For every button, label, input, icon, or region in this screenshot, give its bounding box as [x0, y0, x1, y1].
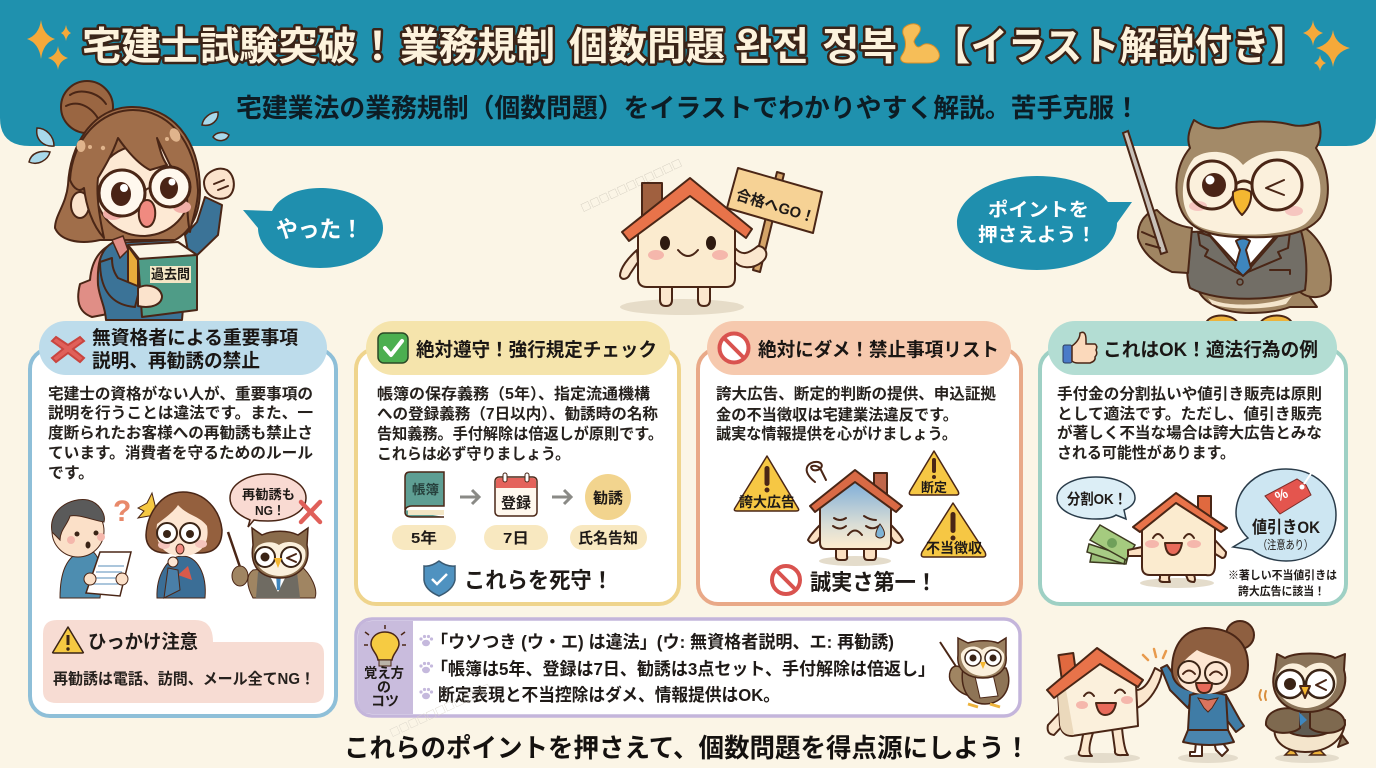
panel: prohibited items	[698, 321, 1021, 604]
warning sign: 誇大広告: 誇大広告	[739, 494, 795, 510]
tip side tab	[358, 621, 413, 714]
icon: light bulb	[364, 625, 406, 666]
panel: unqualified persons prohibition	[30, 321, 336, 716]
open eye	[1202, 173, 1226, 197]
title: 個数問題	[569, 26, 725, 69]
note: ※著しい不当値引きは	[1228, 568, 1337, 582]
speech bubble: 値引きOK: 値引きOK	[1252, 518, 1321, 537]
sign board	[727, 168, 822, 233]
callout: trap warning	[43, 620, 324, 703]
speech bubble: 分割OK！	[1057, 477, 1135, 519]
head	[1176, 120, 1328, 237]
panel heading: 絶対遵守！強行規定チェック	[416, 339, 657, 361]
icon: registration calendar	[495, 473, 537, 516]
illustration: happy house	[1128, 493, 1227, 588]
icon: small red cross	[301, 502, 320, 522]
body text: 度断られたお客様への再勧誘も禁止さ	[48, 423, 313, 442]
house body	[638, 190, 735, 287]
tie	[1235, 238, 1251, 276]
body text	[1057, 384, 1322, 462]
icon: motion lines	[1260, 690, 1266, 700]
arrow	[552, 490, 571, 504]
speech bubble: 値引きOK	[1233, 469, 1336, 561]
character: house mascot with sign	[620, 168, 822, 315]
wing right	[1300, 225, 1331, 297]
panel header pill	[1048, 321, 1337, 375]
tip tab label: 覚え方	[364, 665, 404, 681]
illustration: small owl with memo	[940, 638, 1009, 707]
hand	[138, 286, 162, 307]
closing phrase: 誠実さ第一！	[810, 570, 937, 595]
backpack	[78, 240, 122, 317]
mouth	[139, 200, 155, 227]
speech bubble: ポイントを押さえよう！: ポイントを	[988, 198, 1089, 221]
body text: これらは必ず守りましょう。	[377, 445, 570, 463]
title: 業務規制	[400, 26, 555, 69]
panel header pill	[39, 321, 327, 375]
blush	[1189, 201, 1303, 216]
face patch	[1183, 151, 1320, 234]
body text: ています。消費者を守るためのルール	[48, 444, 314, 462]
title: 완전	[735, 26, 809, 69]
fist	[204, 169, 234, 199]
panel header pill	[366, 321, 670, 375]
panel heading	[92, 327, 298, 372]
icon: stress swirl	[807, 462, 826, 482]
speech bubble: ポイントを押さえよう！: 押さえよう！	[978, 224, 1096, 246]
speech bubble: 再勧誘もNG！: NG！	[255, 503, 285, 518]
character: surprised girl with book: 過去問	[151, 266, 190, 282]
watermark: □□□□□□□□□□□	[387, 680, 493, 740]
icon: sparkles right	[1303, 20, 1350, 71]
label pill: 7日	[484, 525, 548, 550]
title	[82, 26, 1307, 69]
ear	[71, 192, 89, 218]
icon: solicitation circle	[585, 474, 631, 520]
title: ！	[358, 26, 397, 69]
body text: される可能性があります。	[1057, 443, 1235, 462]
lapels	[1198, 232, 1290, 275]
icon: no entry	[772, 566, 800, 594]
icon: sweat drops	[29, 112, 229, 163]
book cover	[138, 255, 197, 317]
speech bubble: 分割OK！: 分割OK！	[1067, 491, 1127, 508]
bun	[61, 81, 113, 133]
hair fringe	[70, 110, 198, 238]
body text: 説明を行うことは違法です。また、一	[48, 403, 313, 422]
tip line 3: 断定表現と不当控除はダメ、情報提供はOK。	[438, 685, 780, 705]
panel heading: これはOK！適法行為の例	[1103, 339, 1318, 361]
winking eye	[1266, 180, 1284, 195]
torso	[98, 240, 188, 320]
panel frame	[356, 349, 679, 604]
legs	[660, 285, 710, 306]
icon: shield	[424, 561, 455, 596]
belly and tail	[1198, 288, 1317, 313]
icon: flexed bicep	[901, 24, 939, 63]
illustration: small owl with bubble	[228, 528, 316, 598]
subtitle: 宅建業法の業務規制（個数問題）をイラストでわかりやすく解説。苦手克服！	[236, 93, 1140, 123]
title: 【イラスト解説付き】	[933, 26, 1307, 69]
tip tab label: の	[377, 679, 391, 695]
book pages	[128, 242, 197, 260]
header band	[0, 0, 1376, 146]
icon: green check	[378, 333, 408, 363]
character: owl teacher with pointer	[1123, 120, 1331, 323]
glasses	[1188, 160, 1302, 210]
panel frame	[1040, 349, 1346, 604]
icon: sparkles left	[27, 20, 71, 70]
icon: banknotes	[1087, 525, 1135, 564]
warning sign: 不当徴収	[921, 503, 986, 557]
warning sign: 不当徴収: 不当徴収	[926, 540, 982, 556]
label pill: 氏名告知: 氏名告知	[578, 529, 638, 547]
shirt	[1208, 233, 1278, 272]
title: 정복	[822, 26, 897, 69]
icon: paw	[419, 688, 433, 699]
panel heading: 絶対にダメ！禁止事項リスト	[758, 338, 999, 361]
body text: 金の不当徴収は宅建業法違反です。	[716, 405, 958, 424]
left arm	[1138, 210, 1192, 273]
chimney	[642, 183, 662, 217]
illustration: owl clapping	[1266, 654, 1348, 763]
panel frame	[30, 349, 336, 716]
pointer	[1123, 131, 1167, 254]
body text: 誇大広告、断定的判断の提供、申込証拠	[716, 385, 996, 403]
icon: paw	[419, 635, 433, 646]
pink strap	[112, 236, 128, 258]
label pill: 5年	[392, 525, 456, 550]
tip line 1: 「ウソつき (ウ・エ) は違法」(ウ: 無資格者説明、エ: 再勧誘)	[431, 632, 894, 652]
icon: ledger book	[405, 472, 444, 517]
hair highlights	[76, 127, 182, 152]
suit	[1187, 228, 1306, 299]
body text: 誠実な情報提供を心がけましょう。	[716, 424, 957, 443]
speech bubble: 値引きOK: （注意あり）	[1258, 538, 1313, 552]
icon: warning triangle	[53, 627, 83, 653]
shadow	[620, 299, 744, 315]
body text	[377, 384, 663, 463]
tip line 2: 「帳簿は5年、登録は7日、勧誘は3点セット、手付解除は倍返し」	[431, 659, 935, 679]
body text	[716, 385, 996, 443]
icon: registration calendar: 登録	[501, 494, 531, 512]
callout heading: ひっかけ注意	[88, 631, 198, 653]
warning sign: 断定: 断定	[921, 480, 947, 495]
speech bubble: ポイントを押さえよう！	[957, 176, 1132, 270]
body text: 帳簿の保存義務（5年）、指定流通機構	[377, 384, 651, 403]
icon: solicitation circle: 勧誘	[593, 490, 623, 507]
hand fingers	[1142, 232, 1160, 248]
roof	[622, 178, 752, 241]
label pill: 7日: 7日	[503, 530, 529, 547]
closing phrase: これらを死守！	[464, 568, 613, 593]
tip tab label	[364, 665, 404, 709]
panel heading: 説明、再勧誘の禁止	[92, 350, 260, 372]
label pill: 5年: 5年	[411, 529, 437, 547]
speech bubble: やった！	[243, 188, 383, 268]
post	[753, 172, 784, 272]
closing message: これらのポイントを押さえて、個数問題を得点源にしよう！	[344, 733, 1030, 763]
body text: が著しく不当な場合は誇大広告とみな	[1057, 423, 1322, 442]
icon: question mark: ?	[113, 495, 131, 528]
note	[1228, 568, 1337, 598]
watermark: □□□□□□□□□□□	[578, 155, 684, 215]
feet	[1206, 316, 1292, 323]
book label	[150, 266, 191, 283]
panel frame	[356, 619, 1020, 716]
icon: red cross	[52, 337, 84, 362]
panel: legal acts	[1040, 321, 1346, 604]
hair back	[55, 107, 200, 242]
blush	[103, 201, 191, 220]
book orange edge	[128, 246, 138, 298]
panel: mandatory rules check	[356, 321, 679, 604]
illustration: surprised woman	[146, 492, 222, 598]
body text: への登録義務（7日以内）、勧誘時の名称	[377, 404, 658, 423]
sleeve	[100, 258, 140, 307]
body text	[48, 384, 314, 482]
sign text: 合格へGO！	[734, 186, 818, 227]
icon: ledger book: 帳簿	[412, 482, 439, 497]
tip tab label: コツ	[371, 693, 399, 709]
button and pocket	[1237, 270, 1290, 285]
icon: no entry	[720, 334, 748, 362]
label pill: 氏名告知	[570, 525, 647, 550]
face	[648, 236, 728, 260]
note: 誇大広告に該当！	[1238, 584, 1325, 598]
body text: 宅建士の資格がない人が、重要事項の	[48, 384, 313, 403]
character: surprised girl with book	[29, 81, 234, 320]
title: 宅建士試験突破	[82, 26, 357, 69]
body text: として適法です。ただし、値引き販売	[1057, 404, 1322, 423]
speech bubble: 値引きOK: %	[1272, 485, 1291, 505]
beak	[1233, 189, 1251, 215]
icon: thumbs up	[1063, 332, 1097, 363]
icon: paw	[419, 662, 433, 673]
illustration: girl high-five	[1161, 621, 1254, 763]
speech bubble: やった！: やった！	[276, 216, 363, 242]
icon: surprise spark	[138, 493, 156, 518]
body text: 告知義務。手付解除は倍返しが原則です。	[377, 424, 663, 443]
icon: discount tag	[1265, 479, 1311, 514]
body text: 手付金の分割払いや値引き販売は原則	[1057, 384, 1322, 403]
warning sign: 断定	[909, 451, 959, 495]
illustration: house high-five	[1047, 648, 1162, 763]
callout text: 再勧誘は電話、訪問、メール全てNG！	[53, 669, 315, 688]
illustration: man with document	[52, 500, 131, 598]
panel: memory tips	[356, 619, 1020, 716]
panel heading: 無資格者による重要事項	[92, 327, 298, 349]
raised arm	[185, 197, 222, 262]
panel header pill	[707, 321, 1011, 375]
speech bubble: 再勧誘もNG！: 再勧誘も	[242, 487, 295, 502]
panel frame	[698, 349, 1021, 604]
eyes	[111, 177, 178, 206]
arrow	[460, 490, 479, 504]
right arm	[735, 246, 766, 267]
speech bubble: 再勧誘もNG！	[230, 474, 306, 527]
arms	[620, 250, 638, 279]
body text: です。	[48, 464, 94, 482]
face	[96, 145, 190, 236]
glasses	[99, 167, 190, 216]
illustration: sad house	[808, 470, 903, 566]
warning sign: 誇大広告	[734, 456, 799, 511]
icon: clap lines	[1143, 649, 1166, 660]
